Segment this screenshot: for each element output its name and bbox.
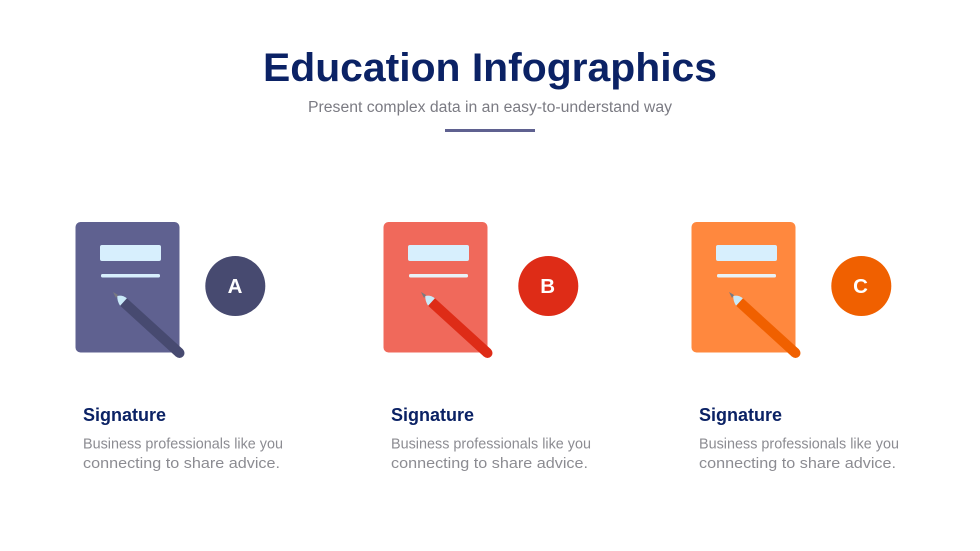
badge A	[205, 256, 265, 316]
document page	[692, 222, 796, 352]
body text A	[83, 436, 283, 472]
icon: document with pen C	[692, 222, 800, 358]
badge A: A	[228, 275, 243, 298]
badge C: C	[853, 275, 868, 298]
body text B	[391, 436, 591, 472]
icon: document with pen B	[384, 222, 492, 358]
panel: A	[76, 222, 283, 472]
body text A: Business professionals like you	[83, 436, 283, 452]
title underline	[445, 129, 535, 132]
pen	[729, 292, 800, 358]
title: Education Infographics	[263, 46, 717, 90]
pen	[421, 292, 492, 358]
subtitle: Present complex data in an easy-to-understand way	[308, 99, 672, 116]
document page	[384, 222, 488, 352]
heading C: Signature	[699, 405, 782, 425]
document page	[76, 222, 180, 352]
body text C	[699, 436, 899, 472]
body text B: connecting to share advice.	[391, 456, 588, 472]
document line	[101, 274, 160, 278]
body text C: Business professionals like you	[699, 436, 899, 452]
badge C	[831, 256, 891, 316]
document line	[717, 274, 776, 278]
body text A: connecting to share advice.	[83, 456, 280, 472]
panel: B	[384, 222, 591, 472]
heading B: Signature	[391, 405, 474, 425]
document heading bar	[408, 245, 469, 261]
document heading bar	[716, 245, 777, 261]
badge B	[518, 256, 578, 316]
document heading bar	[100, 245, 161, 261]
pen	[113, 292, 184, 358]
badge B: B	[540, 275, 555, 298]
body text C: connecting to share advice.	[699, 456, 896, 472]
document line	[409, 274, 468, 278]
heading A: Signature	[83, 405, 166, 425]
panel: C	[692, 222, 899, 472]
icon: document with pen A	[76, 222, 184, 358]
body text B: Business professionals like you	[391, 436, 591, 452]
